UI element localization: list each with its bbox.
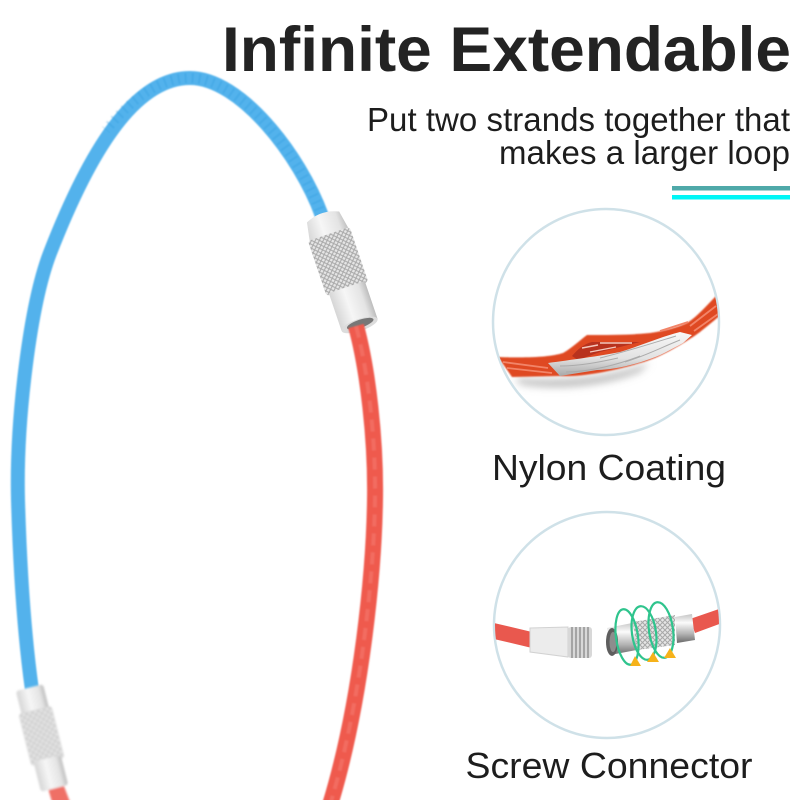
screw connector on loop, bottom left xyxy=(13,683,71,800)
panel: screw connector detail xyxy=(490,512,722,738)
subtitle xyxy=(367,101,790,171)
red coating xyxy=(498,296,722,377)
socket xyxy=(606,614,695,656)
arrow heads xyxy=(630,648,676,666)
threaded end xyxy=(530,627,592,658)
cable shadow xyxy=(515,362,650,387)
accent lines xyxy=(672,186,790,200)
label: screw connector: Screw Connector xyxy=(466,745,753,786)
subtitle: Put two strands together that xyxy=(367,101,790,138)
blue wire loop xyxy=(18,78,322,690)
red wire right xyxy=(692,609,719,633)
red wire loop xyxy=(330,326,375,800)
subtitle: makes a larger loop xyxy=(499,134,790,171)
label: nylon coating: Nylon Coating xyxy=(492,447,726,488)
title: Infinite Extendable xyxy=(222,15,791,85)
red wire left xyxy=(495,623,530,648)
exposed steel strand xyxy=(548,332,692,376)
torn coating highlights xyxy=(582,343,632,352)
tear in coating xyxy=(572,342,640,360)
screw connector on loop, top right xyxy=(301,206,382,338)
strand lines xyxy=(560,336,680,372)
panel: nylon coating detail xyxy=(493,209,722,435)
rotation arrows xyxy=(612,601,677,666)
coating stripes xyxy=(503,306,718,373)
